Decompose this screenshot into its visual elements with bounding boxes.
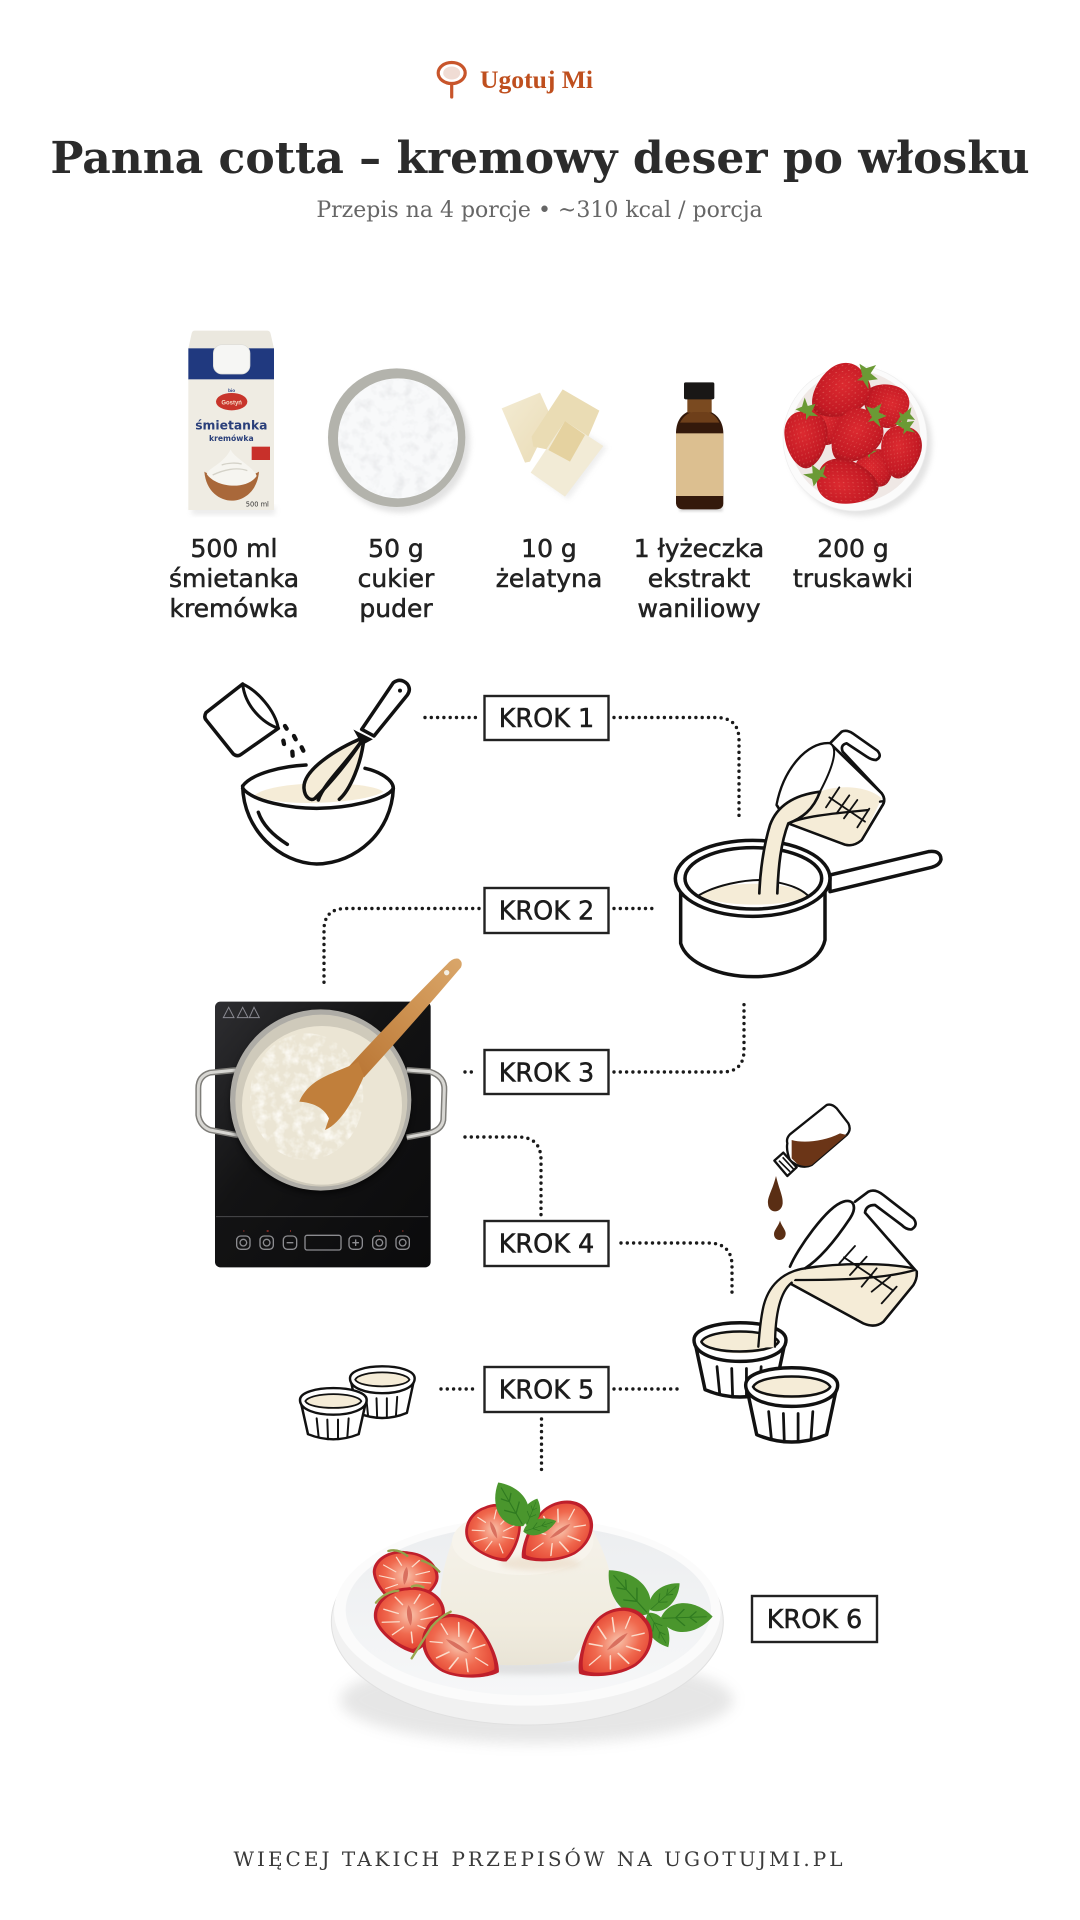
ingredient label: śmietanka: kremówka (169, 594, 299, 623)
strawberry and mint on the right (559, 1560, 713, 1697)
subtitle: Przepis na 4 porcje • ~310 kcal / porcja (316, 198, 763, 223)
panna cotta (440, 1508, 620, 1675)
icon: cream carton: bio (228, 388, 235, 393)
panel: plated panna cotta (331, 1475, 733, 1743)
step label: KROK 3: KROK 3 (499, 1058, 594, 1088)
icon: cream carton: śmietanka (195, 418, 267, 432)
connector lines (324, 718, 744, 1472)
pouring stream (759, 792, 820, 894)
step label: KROK 6 (752, 1596, 877, 1642)
step label: KROK 1: KROK 1 (499, 704, 594, 734)
ingredient label: śmietanka: 500 ml (191, 534, 277, 563)
icon: saucepan with pouring jug (675, 731, 941, 977)
icon: bowl of strawberries (783, 346, 932, 516)
step label: KROK 6: KROK 6 (767, 1605, 862, 1635)
panel: ingredients (169, 331, 932, 623)
icon: cream carton: Gostyń (221, 400, 242, 406)
wooden spoon (299, 958, 462, 1130)
whisk (304, 680, 409, 800)
stream outline (759, 792, 820, 893)
logo: Ugotuj Mi (438, 62, 593, 97)
ingredient label: ekstrakt waniliowy: 1 łyżeczka (634, 534, 764, 563)
step label: KROK 1 (484, 696, 608, 740)
icon: cream carton: 500 ml (246, 501, 269, 509)
ingredient label: śmietanka: śmietanka (169, 564, 299, 593)
logo wordmark: Ugotuj Mi (480, 65, 593, 94)
ingredient label: ekstrakt waniliowy: ekstrakt (648, 564, 750, 593)
pot handles (198, 1070, 444, 1137)
icon: cup, whisk and bowl (205, 680, 409, 864)
icon: vanilla bottle, jug and ramekins (694, 1105, 917, 1442)
footer call to action: WIĘCEJ TAKICH PRZEPISÓW NA UGOTUJMI.PL (233, 1846, 846, 1871)
ingredient label: truskawki: truskawki (793, 564, 913, 593)
ingredient label: cukier puder: puder (359, 594, 433, 623)
vanilla drops (768, 1176, 786, 1240)
step label: KROK 2 (484, 888, 608, 933)
strawberries on the left (368, 1547, 515, 1698)
ingredient label: ekstrakt waniliowy: waniliowy (638, 594, 761, 623)
step label: KROK 2: KROK 2 (499, 896, 594, 926)
ingredient label: truskawki: 200 g (817, 534, 889, 563)
strawberries and mint on top (458, 1475, 604, 1581)
induction hob (215, 1002, 431, 1267)
vanilla bottle (774, 1105, 850, 1176)
icon: spoon pin (438, 62, 465, 97)
mixing bowl (243, 765, 393, 864)
title: Panna cotta – kremowy deser po włosku (50, 133, 1030, 184)
measuring jug (777, 731, 884, 845)
icon: pot on induction hob (198, 958, 462, 1267)
icon: gelatin sheets (502, 389, 607, 499)
icon: filled ramekins chilling (300, 1366, 415, 1439)
icon: cream carton (188, 331, 275, 515)
icon: cream carton: kremówka (209, 434, 254, 443)
ingredient label: cukier puder: cukier (358, 564, 435, 593)
ingredient label: żelatyna: 10 g (521, 534, 577, 563)
step label: KROK 3 (484, 1050, 608, 1094)
measuring jug (790, 1191, 917, 1325)
saucepan (675, 840, 941, 977)
step label: KROK 4: KROK 4 (499, 1230, 594, 1260)
step label: KROK 5 (484, 1367, 608, 1412)
icon: vanilla extract bottle (676, 382, 723, 511)
icon: powdered sugar bowl (328, 368, 470, 513)
pot with cream (230, 1009, 411, 1194)
cup pouring sugar (205, 684, 303, 756)
step label: KROK 5: KROK 5 (499, 1376, 594, 1406)
ingredient label: żelatyna: żelatyna (496, 564, 602, 593)
step label: KROK 4 (484, 1221, 608, 1266)
plate (331, 1518, 723, 1725)
plate shadow (340, 1657, 733, 1743)
back ramekin (694, 1323, 786, 1397)
front ramekin (746, 1368, 838, 1442)
ingredient label: cukier puder: 50 g (368, 534, 424, 563)
pouring stream (758, 1268, 805, 1347)
